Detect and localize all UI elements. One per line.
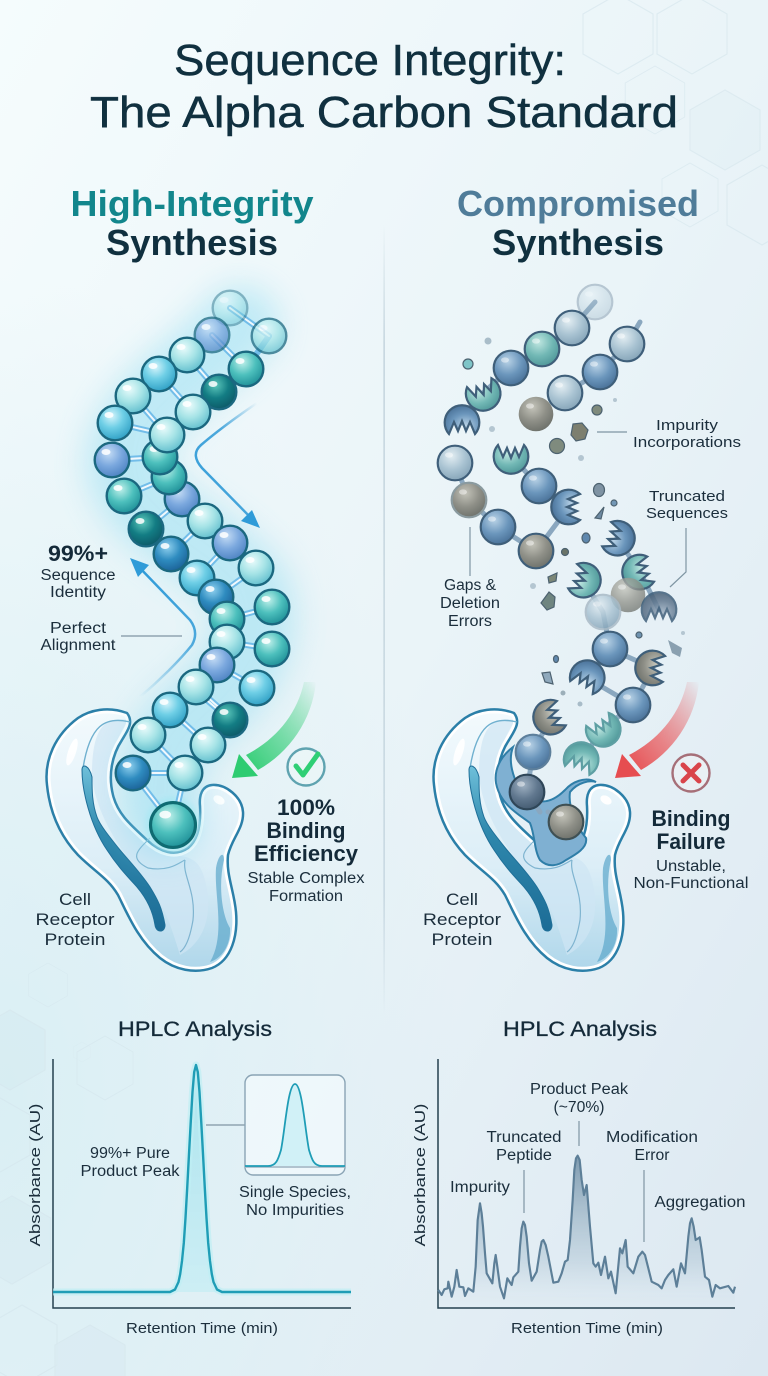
y axis label: Absorbance (AU) <box>27 1104 44 1246</box>
axes <box>438 1059 735 1308</box>
trace <box>438 1156 735 1298</box>
icon: cell receptor protein, right <box>434 709 630 971</box>
peak labels: Product Peak <box>530 1081 628 1098</box>
label: cell receptor protein, left: Receptor <box>36 911 115 929</box>
label: truncated sequences: Truncated <box>649 489 725 505</box>
peptide chain, compromised <box>438 285 685 839</box>
label: cell receptor protein, right: Protein <box>432 931 492 949</box>
label: cell receptor protein, left: Protein <box>44 931 106 949</box>
peak labels: Modification <box>606 1129 698 1146</box>
inset leader <box>206 1124 245 1126</box>
stat: 100% binding efficiency <box>248 795 365 905</box>
stat: binding failure <box>634 806 748 892</box>
stat: 100% binding efficiency: 100% <box>277 795 335 820</box>
stat: binding failure: Non-Functional <box>634 875 748 892</box>
binding pocket <box>496 747 596 865</box>
icon: cell receptor protein, left <box>47 709 243 971</box>
label: impurity incorporations: Impurity <box>656 418 719 434</box>
peak labels: Impurity <box>450 1179 510 1196</box>
title <box>90 36 678 137</box>
label: impurity incorporations <box>597 418 741 451</box>
rungs <box>112 308 272 825</box>
chart: hplc pure peak: Product Peak <box>80 1163 180 1180</box>
label: perfect alignment: Alignment <box>40 637 116 654</box>
stat: 99%+ sequence identity: 99%+ <box>48 541 108 566</box>
peak labels: (~70%) <box>554 1099 604 1116</box>
label: cell receptor protein, right: Cell <box>446 891 478 909</box>
label: cell receptor protein, left <box>36 891 115 949</box>
debris fragments <box>463 338 685 706</box>
heading: high-integrity synthesis: High-Integrity <box>70 183 314 224</box>
chart: hplc impure profile <box>412 1059 746 1337</box>
damaged amino acid beads <box>438 285 676 839</box>
heading: high-integrity synthesis: Synthesis <box>106 222 278 263</box>
heading: high-integrity synthesis <box>70 183 314 263</box>
title: The Alpha Carbon Standard <box>90 88 678 137</box>
label: gaps and deletion errors: Gaps & <box>444 577 497 594</box>
stat: 100% binding efficiency: Binding <box>266 818 346 843</box>
peak labels: Aggregation <box>654 1194 746 1211</box>
amino acid beads <box>95 291 289 847</box>
x axis label: Retention Time (min) <box>511 1320 663 1337</box>
chart: hplc pure peak <box>27 1059 351 1337</box>
peptide helix, high-integrity <box>95 291 289 847</box>
title: Sequence Integrity: <box>174 36 566 85</box>
leader lines <box>524 1121 644 1242</box>
inset caption: Single Species, <box>239 1184 351 1201</box>
arrow: helical twist up <box>130 558 195 697</box>
label: gaps and deletion errors: Errors <box>448 613 492 630</box>
center divider <box>384 225 385 1015</box>
stat: 100% binding efficiency: Efficiency <box>254 841 359 866</box>
trace area <box>438 1156 735 1307</box>
label: gaps and deletion errors <box>440 527 500 630</box>
peak labels: Truncated <box>486 1129 562 1146</box>
heading: compromised synthesis: Synthesis <box>492 222 664 263</box>
axes <box>53 1059 351 1308</box>
icon: x mark <box>672 754 710 792</box>
label: truncated sequences: Sequences <box>646 506 728 522</box>
label: cell receptor protein, right <box>423 891 502 949</box>
stat: 99%+ sequence identity <box>40 541 116 601</box>
peak labels: Error <box>634 1147 670 1164</box>
peak labels: Peptide <box>496 1147 552 1164</box>
heading: hplc analysis, left: HPLC Analysis <box>118 1017 272 1041</box>
icon: check <box>288 748 324 786</box>
inset <box>245 1075 345 1175</box>
arrow: helical twist down <box>196 403 260 528</box>
stat: 99%+ sequence identity: Identity <box>50 584 106 601</box>
peak labels <box>450 1081 746 1211</box>
label: gaps and deletion errors: Deletion <box>440 595 500 612</box>
label: truncated sequences <box>646 489 728 587</box>
heading: hplc analysis, right: HPLC Analysis <box>503 1017 657 1041</box>
stat: 100% binding efficiency: Stable Complex <box>248 870 365 887</box>
label: perfect alignment: Perfect <box>50 620 107 637</box>
helix glow <box>125 325 255 820</box>
heading: compromised synthesis <box>457 183 699 263</box>
stat: 99%+ sequence identity: Sequence <box>40 567 116 584</box>
stat: 100% binding efficiency: Formation <box>269 888 343 905</box>
label: impurity incorporations: Incorporations <box>633 435 741 451</box>
x axis label: Retention Time (min) <box>126 1320 278 1337</box>
label: perfect alignment <box>40 620 182 654</box>
trace <box>53 1065 351 1292</box>
stat: binding failure: Binding <box>652 806 730 831</box>
arrow: red binding failure <box>615 682 699 778</box>
arrow: green binding <box>232 682 316 778</box>
label: cell receptor protein, left: Cell <box>59 891 91 909</box>
stat: binding failure: Unstable, <box>656 858 726 875</box>
y axis label: Absorbance (AU) <box>412 1104 429 1246</box>
label: cell receptor protein, right: Receptor <box>423 911 502 929</box>
broken links <box>455 302 659 822</box>
chart: hplc pure peak: No Impurities <box>246 1202 344 1219</box>
peak label: 99%+ Pure <box>90 1145 170 1162</box>
stat: binding failure: Failure <box>656 829 726 854</box>
heading: compromised synthesis: Compromised <box>457 183 699 224</box>
